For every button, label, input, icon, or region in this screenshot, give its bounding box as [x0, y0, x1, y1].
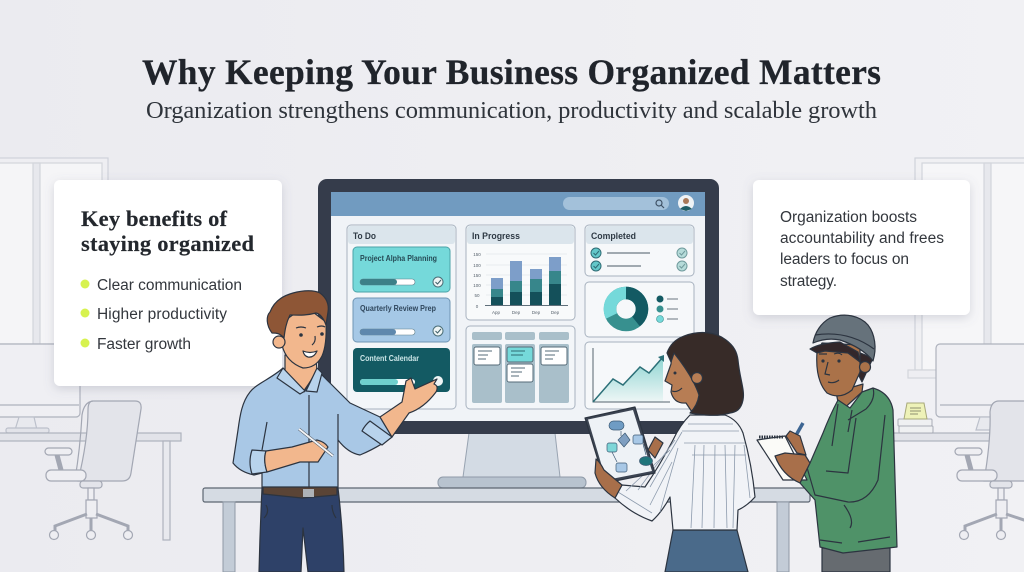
panel: accountability note [753, 180, 970, 315]
panel: in progress bar chart: 0 [476, 304, 479, 309]
tablet [585, 407, 655, 483]
panel: in progress bar chart: 150 [473, 273, 481, 278]
striped shirt [615, 415, 755, 530]
bullet list: Higher productivity [97, 306, 227, 323]
neck [836, 384, 863, 412]
person: presenter [233, 291, 437, 572]
task card: project alpha [353, 247, 450, 292]
hand [786, 431, 806, 455]
panel: in progress bar chart: Dep [532, 310, 541, 315]
task card: content calendar [353, 348, 450, 392]
desk [203, 488, 810, 572]
left cuff [250, 450, 267, 474]
notepad [757, 436, 807, 480]
panel: growth line chart [585, 342, 694, 409]
panel: in progress bar chart: App [492, 310, 500, 315]
office background: left side [0, 158, 181, 540]
hair [810, 342, 860, 362]
bullet list [80, 277, 242, 353]
panel: key benefits [54, 180, 282, 386]
panel: to do: To Do [353, 231, 376, 242]
panel: in progress bar chart: 150 [473, 252, 481, 257]
belt [263, 487, 337, 498]
pen [791, 423, 803, 444]
panel: accountability note: accountability and frees [780, 230, 944, 247]
panel: completed: Completed [591, 231, 636, 242]
beanie [813, 315, 875, 361]
panel: in progress bar chart [466, 225, 575, 320]
panel: accountability note: Organization boosts [780, 209, 917, 226]
bullet list: Clear communication [97, 277, 242, 294]
task card: project alpha: Project Alpha Planning [360, 254, 437, 263]
monitor stand [438, 433, 586, 488]
title: Why Keeping Your Business Organized Matters [142, 52, 881, 92]
panel: in progress bar chart: 50 [474, 293, 480, 298]
panel: to do [347, 225, 456, 409]
bullet list: Faster growth [97, 336, 191, 353]
hair [667, 333, 743, 415]
dashboard top bar [331, 192, 705, 216]
raised arm and hand [380, 378, 437, 437]
forearm and hand with pen [265, 440, 328, 472]
sideburn hair [856, 352, 873, 382]
subtitle: Organization strengthens communication, productivity and scalable growth [146, 97, 877, 124]
panel: accountability note: strategy. [780, 273, 837, 290]
collar [277, 368, 322, 394]
panel: completed [585, 225, 694, 276]
skirt [665, 530, 748, 572]
task card: quarterly review: Quarterly Review Prep [360, 304, 436, 313]
hair [267, 291, 328, 338]
icon: desk note and books [898, 403, 933, 433]
panel: in progress bar chart: Dep [551, 310, 560, 315]
face [665, 350, 710, 412]
panel: in progress bar chart: In Progress [472, 231, 520, 242]
face [821, 359, 825, 363]
panel: accountability note: leaders to focus on [780, 251, 909, 268]
hoodie [800, 388, 897, 553]
hand left [595, 459, 622, 498]
shirt [233, 368, 392, 488]
panel: donut chart [585, 282, 694, 337]
task card: content calendar: Content Calendar [360, 354, 419, 363]
panel: kanban board [466, 326, 575, 409]
panel: in progress bar chart: 100 [473, 283, 481, 288]
panel: in progress bar chart: 100 [473, 263, 481, 268]
head [817, 343, 860, 396]
heading: key benefits: Key benefits of [81, 206, 228, 231]
face [299, 333, 303, 337]
person: woman with tablet [585, 333, 755, 572]
right cuff [362, 421, 392, 445]
panel: in progress bar chart: Dep [512, 310, 521, 315]
person: man with notepad [757, 315, 897, 572]
pants [822, 548, 890, 572]
monitor [318, 179, 719, 434]
office background: right side [892, 158, 1024, 540]
trousers [259, 488, 344, 572]
neck [285, 355, 317, 392]
hand right [648, 437, 663, 458]
task card: quarterly review [353, 298, 450, 342]
heading: key benefits: staying organized [81, 231, 254, 256]
head [282, 306, 326, 368]
